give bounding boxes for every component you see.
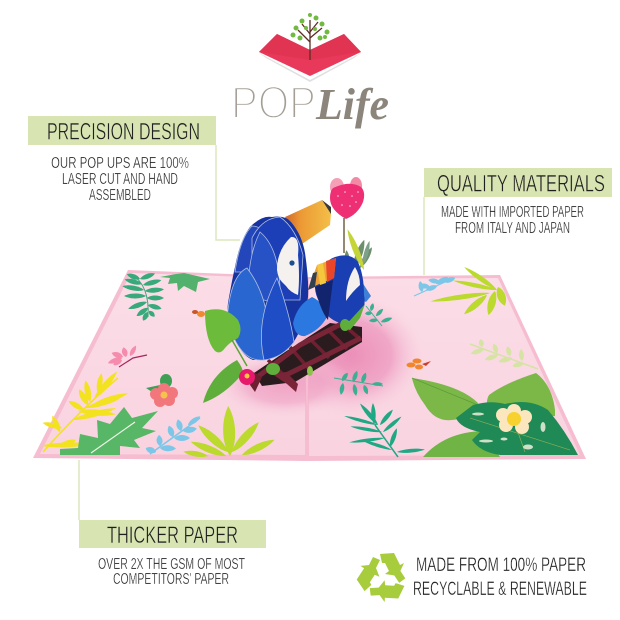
logo [231,13,389,129]
cream flower [496,404,532,434]
monstera leaf [456,402,578,455]
crease shading [306,278,308,458]
panel: precision design [28,116,240,240]
yellow palm [40,370,129,452]
lime palm right [430,265,509,317]
icon: recycling arrows [352,553,412,607]
connector line [216,145,240,240]
foreground leaves and flower [203,304,365,403]
body text: ASSEMBLED [89,187,151,204]
heading band [424,168,612,197]
heading band [28,116,216,145]
lime leaf cluster [183,406,276,459]
small leaves [266,304,365,376]
body [228,217,308,360]
fern top left [122,271,164,322]
eye [289,260,295,266]
big toucan [228,200,331,360]
logo: Life wordmark: Life [315,80,389,129]
face [346,267,360,301]
green serrated leaf [60,407,158,455]
panel: quality materials [424,168,612,275]
face [277,237,299,295]
lower leaf [203,360,243,403]
body text [98,556,245,588]
lattice stand [250,322,362,392]
recycling text [413,555,587,600]
logo: tree [290,13,330,60]
blue sprig right [414,275,456,296]
heading: THICKER PAPER [107,522,238,549]
pop-up card [33,177,586,461]
body text: OVER 2X THE GSM OF MOST [98,556,245,573]
connector line [423,197,425,275]
teal sprig lower [334,370,383,396]
pink butterfly [107,345,147,367]
upper feathers [235,217,303,305]
pink flower [239,369,255,385]
beak [285,200,331,244]
body text: OUR POP UPS ARE 100% [51,155,189,172]
dark inner [315,280,333,320]
rear wing [362,282,371,302]
teal palm [344,402,425,457]
orange butterfly left [192,310,205,317]
coral flower [146,374,178,407]
beak [308,258,336,290]
back leaves [344,228,374,271]
panel: thicker paper [79,460,266,588]
flower balloon [330,177,364,253]
teal sprig upper [365,303,393,326]
body text [51,155,189,204]
small toucan [308,255,371,323]
blue sprig left [145,414,202,455]
orange butterfly right [406,358,431,370]
body text: LASER CUT AND HAND [62,171,178,188]
middle wing [293,297,327,336]
big leaves [412,373,555,457]
large heart leaf [205,309,240,352]
pale lime sprig [470,339,538,369]
lower feathers [228,268,294,360]
logo: POP wordmark: POP [231,77,316,128]
body text [441,204,584,237]
heading: PRECISION DESIGN [47,118,200,146]
body text: COMPETITORS' PAPER [113,571,229,588]
logo: red open book [259,34,361,82]
card base [33,270,586,461]
connector line [78,460,80,520]
heading band [79,520,266,548]
leaf top [160,273,210,292]
body [315,255,365,323]
leaf stem [232,340,247,366]
